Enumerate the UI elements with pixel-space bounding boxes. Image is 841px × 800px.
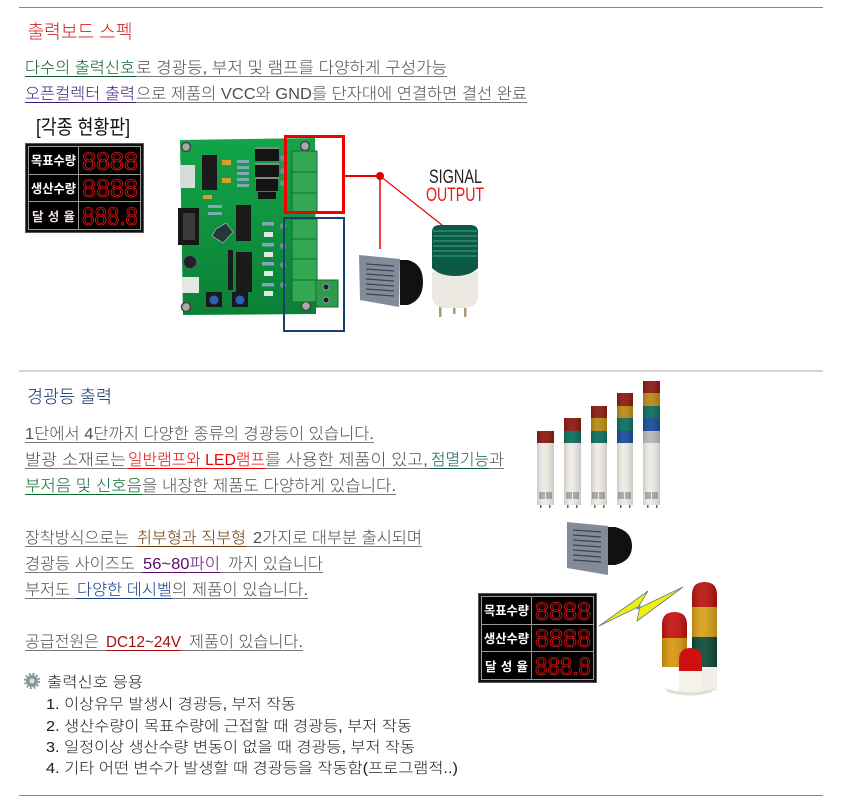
status board panel top: 8888 [82, 175, 138, 203]
tower 1 [537, 431, 554, 505]
signal application list: 4. 기타 어떤 변수가 발생할 때 경광등을 작동함(프로그램적..) [46, 760, 458, 777]
title: output board spec: 출력보드 스펙 [28, 21, 132, 43]
text block: output board line 1: 다수의 출력신호 [25, 59, 135, 77]
tower 5 [643, 381, 660, 505]
text block: line 2: 를 사용한 제품이 있고, [265, 451, 428, 469]
status board panel top: 생산수량 [31, 182, 76, 196]
status board panel top: 888.8 [82, 203, 138, 231]
text block: line 6: 다양한 데시벨 [77, 581, 172, 599]
text block: line 6 [25, 581, 308, 599]
status board panel bottom [478, 593, 597, 683]
text block: output board line 1 [25, 59, 447, 77]
icon: gear [25, 674, 39, 688]
text block: line 4: 장착방식으로는 [25, 529, 129, 547]
text block: line 5 [25, 555, 323, 573]
red highlight box [286, 136, 344, 212]
status board panel top [25, 143, 144, 233]
text block: line 2: 점멸기능 [431, 451, 489, 469]
text block: line 4: 2가지로 대부분 출시되며 [253, 529, 422, 547]
text block: line 2: 발광 소재로는 [25, 451, 126, 469]
heat sinks [255, 147, 279, 199]
tower 4 [617, 393, 633, 505]
status board panel bottom: 목표수량 [484, 604, 529, 618]
connector lines from terminals [344, 172, 442, 249]
status board panel bottom: 달 성 율 [485, 660, 528, 674]
text block: line 1: 1단에서 4단까지 다양한 종류의 경광등이 있습니다. [25, 425, 374, 443]
text block: output board line 1: 로 경광등, 부저 및 램프를 다양하게 구성가능 [136, 59, 447, 77]
circuit board photo [178, 138, 338, 315]
status board panel top: 8888 [82, 148, 138, 176]
text block: line 4 [25, 529, 422, 547]
icon: buzzer 2 [567, 522, 632, 575]
status board panel bottom: 생산수량 [484, 632, 529, 646]
signal application list [46, 674, 458, 777]
text block: line 7: 공급전원은 [25, 633, 99, 651]
blue buttons [206, 292, 248, 307]
tower 2 [564, 418, 581, 505]
icon: lightning bolt [599, 587, 683, 626]
signal application list: 3. 일정이상 생산수량 변동이 없을 때 경광등, 부저 작동 [46, 739, 415, 756]
status board panel bottom: 8888 [535, 598, 591, 626]
text block: line 2: 일반램프와 LED램프 [128, 451, 265, 469]
green terminals [292, 151, 317, 302]
medium lamp [662, 612, 687, 667]
signal application list: 1. 이상유무 발생시 경광등, 부저 작동 [46, 696, 296, 713]
signal output label: SIGNAL [429, 167, 482, 188]
text block: line 7: DC12~24V [106, 634, 181, 651]
text block: line 5: 경광등 사이즈도 [25, 555, 135, 573]
text block: output board line 2: 으로 제품의 VCC와 GND를 단자대에 연결하면 결선 완료 [136, 85, 527, 103]
text block: line 5: 까지 있습니다 [228, 555, 323, 573]
text block: line 3 [25, 477, 396, 495]
screws [182, 142, 310, 312]
section heading: warning light output: 경광등 출력 [27, 387, 112, 407]
icon: green signal lamp [432, 225, 478, 317]
status board panel top: 목표수량 [31, 154, 76, 168]
tower 3 [591, 406, 607, 505]
text block: line 3: 부저음 및 신호음 [25, 477, 142, 495]
ribbon connector [178, 208, 199, 245]
signal output label [426, 167, 484, 206]
text block: line 4: 취부형과 직부형 [137, 529, 246, 547]
tall lamp [692, 582, 717, 691]
text block: output board line 2: 오픈컬렉터 출력 [25, 85, 135, 103]
white connector [180, 165, 195, 188]
icon: signal lamps group [662, 582, 717, 696]
text block: line 7: 제품이 있습니다. [189, 633, 303, 651]
text block: line 2: 과 [489, 451, 504, 469]
signal output label: OUTPUT [426, 185, 484, 206]
text block: line 6: 부저도 [25, 581, 70, 599]
resistors [208, 160, 274, 286]
text block: line 3: 을 내장한 제품도 다양하게 있습니다. [142, 477, 396, 495]
signal application list: 2. 생산수량이 목표수량에 근접할 때 경광등, 부저 작동 [46, 718, 412, 735]
status board panel bottom: 8888 [535, 625, 591, 653]
text block: line 7 [25, 633, 303, 651]
small lamp [665, 648, 715, 696]
capacitor [184, 256, 196, 268]
chip [212, 223, 233, 243]
icon: buzzer [359, 255, 423, 307]
heading: status boards: [각종 현황판] [36, 116, 130, 139]
text block: line 5: 56~80파이 [143, 555, 220, 573]
blue highlight box [284, 218, 344, 331]
status board panel bottom: 888.8 [535, 653, 591, 681]
text block: line 6: 의 제품이 있습니다. [172, 581, 308, 599]
stack light towers [537, 381, 660, 508]
status board panel top: 달 성 율 [32, 210, 75, 224]
signal application list: 출력신호 응용 [47, 674, 143, 691]
text block: line 2 [25, 451, 504, 469]
ICs [202, 155, 252, 292]
